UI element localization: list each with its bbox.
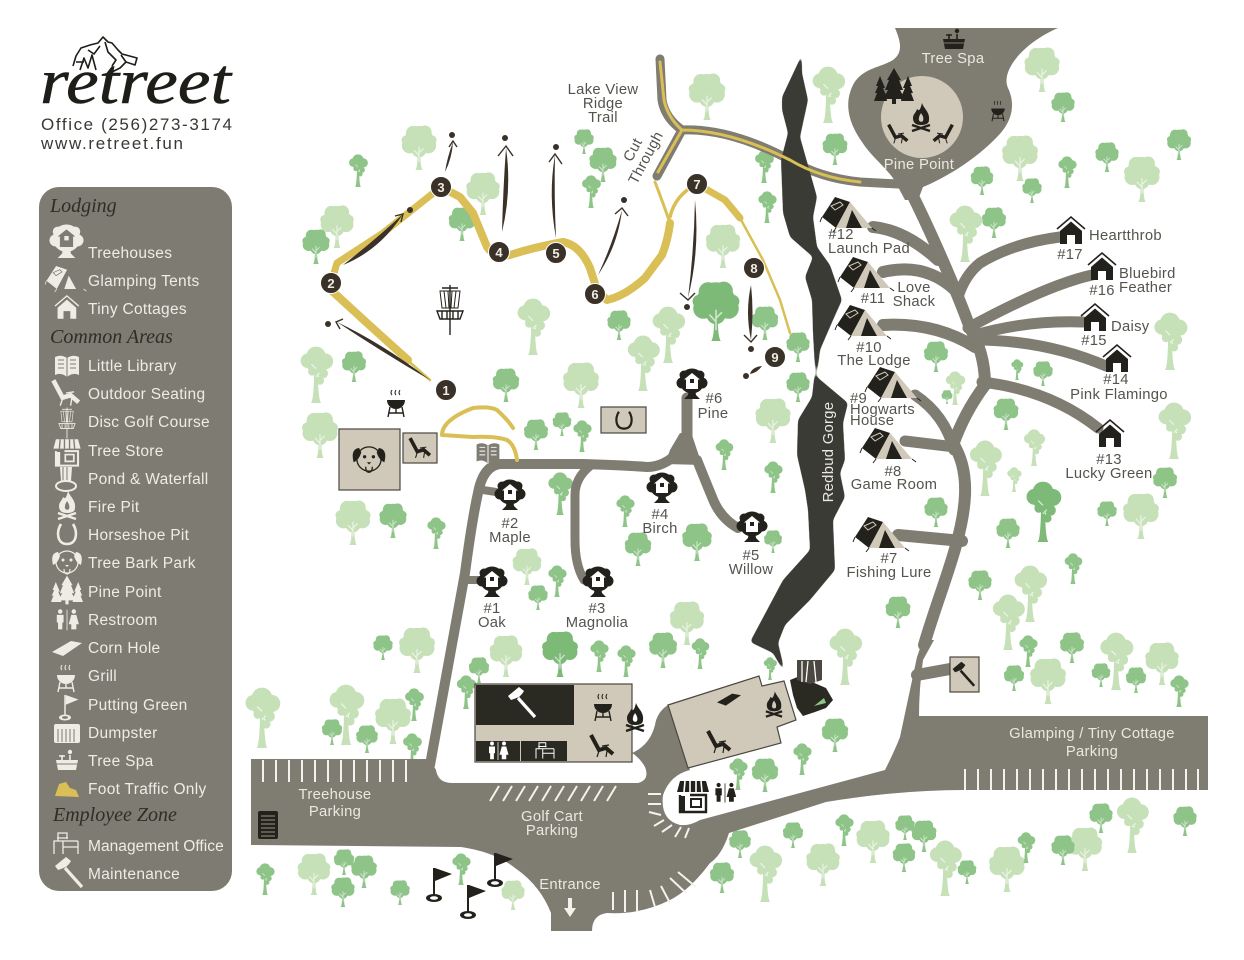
legend row: grill: Grill (88, 668, 117, 685)
website: www.retreet.fun (40, 134, 183, 153)
legend row: treehouses (49, 224, 172, 262)
icon: entrance arrow (564, 898, 576, 917)
numbered tee markers: 5 (552, 246, 560, 261)
map labels: trail and road names: Lake View (568, 82, 638, 98)
map labels: trail and road names: Parking (309, 804, 361, 820)
tents and labels: #8 (884, 464, 902, 480)
legend row: horseshoe pit (58, 524, 190, 544)
numbered tee markers: 3 (437, 180, 445, 195)
treehouses and labels: Birch (642, 521, 678, 537)
legend panel (39, 187, 232, 891)
tiny cottages and labels: #15 (1081, 333, 1107, 349)
tents and labels: Love (897, 280, 931, 296)
tiny cottages and labels: Feather (1119, 280, 1172, 296)
legend row: tiny cottages: Tiny Cottages (88, 301, 187, 318)
legend row: tiny cottages (55, 296, 187, 319)
map labels: trail and road names: Ridge (583, 96, 623, 112)
tents and labels (820, 197, 937, 581)
legend row: pond and waterfall: Pond & Waterfall (88, 471, 209, 488)
maintenance shed (950, 657, 979, 692)
icon: dumpster (258, 811, 278, 839)
map labels: trail and road names (299, 51, 1175, 893)
legend row: outdoor seating (53, 380, 205, 406)
legend row: pine point: Pine Point (88, 584, 162, 601)
waterfall deck building (668, 676, 796, 768)
tiny cottages and labels: #13 (1096, 452, 1122, 468)
treehouses and labels: Maple (489, 530, 531, 546)
logo tree sketch (73, 37, 137, 72)
tree bark park (339, 429, 400, 490)
legend row: pine point (51, 576, 162, 604)
legend row: dumpster (54, 724, 158, 743)
icon: store restrooms (715, 783, 736, 803)
tents and labels: #9 (850, 391, 867, 407)
legend row: treehouses: Treehouses (88, 245, 172, 262)
numbered tee markers: 2 (327, 276, 335, 291)
legend row: restroom (57, 609, 158, 630)
trees (246, 47, 1197, 910)
tents and labels: #10 (856, 340, 882, 356)
tents and labels: Launch Pad (828, 241, 910, 257)
treehouses and labels: Pine (698, 406, 728, 422)
legend row: glamping tents (45, 266, 200, 292)
treehouses and labels: Magnolia (566, 615, 629, 631)
clubhouse building (475, 684, 632, 762)
legend row: little library (55, 356, 177, 377)
legend row: corn hole: Corn Hole (88, 640, 160, 657)
tents and labels: Hogwarts (850, 402, 915, 418)
tents and labels: #7 (880, 551, 898, 567)
map labels: trail and road names: Through (626, 129, 667, 187)
treehouses and labels: #4 (651, 507, 669, 523)
treehouses and labels: #2 (501, 516, 519, 532)
treehouses and labels: #3 (588, 601, 606, 617)
legend row: fire pit: Fire Pit (88, 499, 140, 516)
parking stall lines (263, 760, 1198, 912)
tiny cottages and labels: Heartthrob (1089, 228, 1162, 244)
legend row: tree store (53, 439, 164, 466)
map labels: trail and road names: Trail (588, 110, 618, 126)
tents and labels: #11 (861, 291, 885, 307)
icon: disc golf basket (437, 285, 463, 335)
tents and labels: Fishing Lure (846, 565, 932, 581)
legend row: tree bark park (52, 551, 196, 574)
outdoor seating by bark park (403, 433, 437, 463)
horseshoe pit (601, 407, 646, 433)
legend row: tree spa: Tree Spa (88, 753, 154, 770)
legend row: fire pit (58, 491, 140, 519)
icon: pond and waterfall (790, 658, 833, 716)
legend heading: employee zone: Employee Zone (52, 804, 177, 826)
map labels: trail and road names: Redbud Gorge (821, 402, 837, 502)
tiny cottages and labels: #17 (1057, 247, 1083, 263)
map labels: trail and road names: Entrance (539, 877, 601, 893)
tiny cottages and labels: Pink Flamingo (1070, 387, 1168, 403)
legend row: foot traffic only: Foot Traffic Only (88, 781, 207, 798)
legend row: restroom: Restroom (88, 612, 158, 629)
numbered tee markers: 1 (442, 383, 450, 398)
map labels: trail and road names: Parking (526, 823, 578, 839)
legend row: maintenance (55, 857, 180, 887)
tents and labels: Shack (893, 294, 936, 310)
legend row: horseshoe pit: Horseshoe Pit (88, 527, 190, 544)
legend row: disc golf course (59, 408, 210, 438)
tiny cottages and labels: Daisy (1111, 319, 1150, 335)
legend heading: common areas: Common Areas (50, 326, 173, 348)
legend row: corn hole (52, 640, 160, 657)
tents and labels: Game Room (851, 477, 937, 493)
roads and parking asphalt (251, 28, 1208, 931)
legend row: tree store: Tree Store (88, 443, 164, 460)
numbered tee markers: 9 (771, 350, 779, 365)
legend row: dumpster: Dumpster (88, 725, 158, 742)
treehouses and labels: #5 (742, 548, 760, 564)
logo wordmark: retreet (40, 46, 233, 118)
map labels: trail and road names: Treehouse (299, 787, 371, 803)
legend heading: lodging: Lodging (49, 195, 117, 217)
numbered tee markers: 7 (693, 177, 701, 192)
legend row: disc golf course: Disc Golf Course (88, 414, 210, 431)
legend row: putting green: Putting Green (88, 697, 188, 714)
tiny cottages and labels: Bluebird (1119, 266, 1176, 282)
icon: grill at pine point (991, 101, 1005, 121)
map labels: trail and road names: Golf Cart (521, 809, 583, 825)
icon: little library (477, 443, 499, 463)
treehouses and labels: Willow (729, 562, 773, 578)
treehouses and labels: Oak (478, 615, 506, 631)
legend row: management office: Management Office (88, 838, 224, 855)
logo and contact block (40, 37, 233, 153)
putting green flags (426, 853, 513, 919)
icon: tree spa (943, 29, 965, 49)
map labels: trail and road names: Pine Point (884, 157, 954, 173)
icon: tree store (677, 781, 709, 812)
legend row: maintenance: Maintenance (88, 866, 180, 883)
legend row: glamping tents: Glamping Tents (88, 273, 200, 290)
treehouses and labels: #6 (705, 391, 723, 407)
numbered tee markers (320, 174, 786, 400)
tiny cottages and labels: #16 (1089, 283, 1115, 299)
numbered tee markers: 6 (591, 287, 599, 302)
icon: fire pit outside clubhouse (626, 703, 644, 731)
legend row: grill (57, 665, 117, 692)
treehouses and labels: #1 (483, 601, 501, 617)
icon: grill at bark park (387, 390, 405, 417)
legend row: tree spa (56, 750, 154, 770)
map labels: trail and road names: Tree Spa (922, 51, 985, 67)
tents and labels: House (850, 413, 894, 429)
tiny cottages and labels: Lucky Green (1065, 466, 1153, 482)
map labels: trail and road names: Cut (621, 136, 646, 164)
legend row: pond and waterfall (56, 467, 209, 491)
pine point seating area (874, 68, 963, 158)
tiny cottages and labels: #14 (1103, 372, 1129, 388)
tents and labels: #12 (828, 227, 854, 243)
office phone: Office (256)273-3174 (41, 115, 232, 134)
numbered tee markers: 4 (495, 245, 503, 260)
treehouses and labels (476, 368, 773, 631)
map labels: trail and road names: Parking (1066, 744, 1118, 760)
tents and labels: The Lodge (837, 353, 911, 369)
legend row: tree bark park: Tree Bark Park (88, 555, 196, 572)
numbered tee markers: 8 (750, 261, 758, 276)
legend row: little library: Little Library (88, 358, 177, 375)
tiny cottages and labels (1057, 217, 1176, 482)
legend row: putting green (59, 695, 188, 720)
legend row: outdoor seating: Outdoor Seating (88, 386, 205, 403)
legend row: management office (54, 833, 224, 855)
golden foot trail (331, 62, 860, 460)
Redbud Gorge river (750, 50, 848, 676)
disc golf tee arrows (325, 132, 762, 380)
map labels: trail and road names: Glamping / Tiny Cottage (1009, 726, 1175, 742)
